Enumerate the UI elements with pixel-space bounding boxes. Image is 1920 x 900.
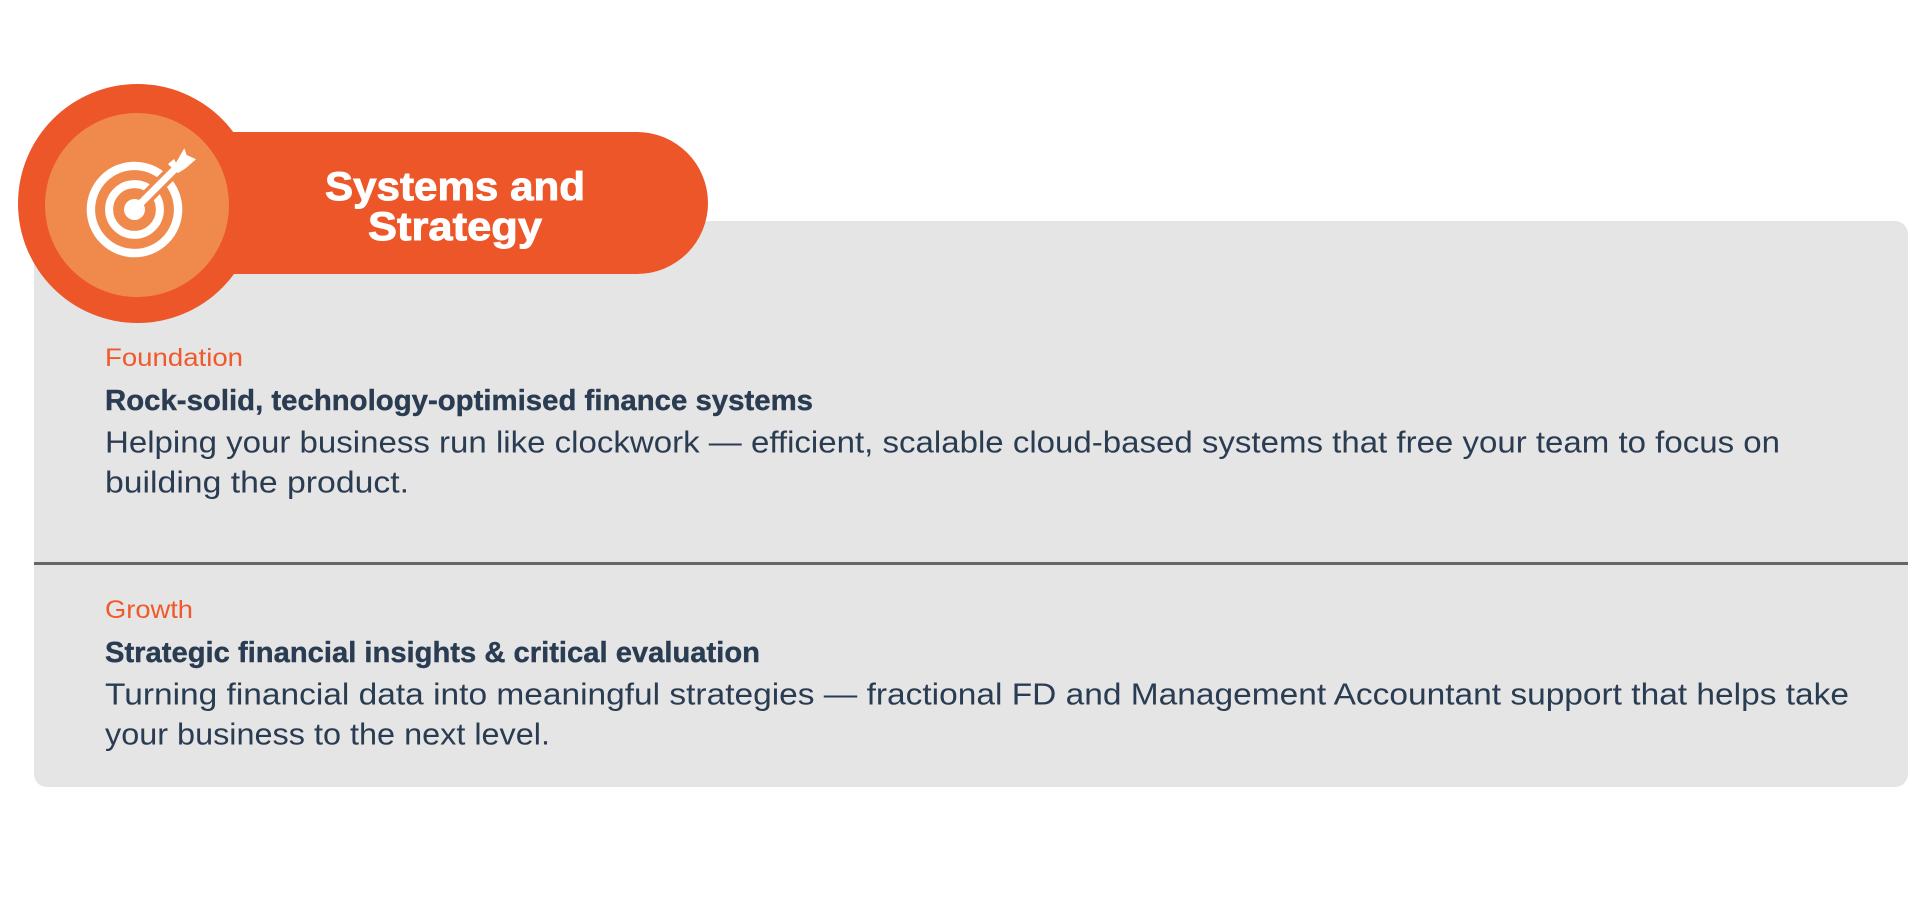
header badge: [18, 84, 708, 323]
text block: growth: [105, 596, 1849, 752]
growth description: Turning financial data into meaningful strategies — fractional FD and Management Accountant support that helps take: [105, 676, 1849, 712]
foundation description: [105, 424, 1780, 500]
foundation description: Helping your business run like clockwork — efficient, scalable cloud-based systems that free your team to focus on: [105, 424, 1780, 460]
foundation heading: Rock-solid, technology-optimised finance systems: [105, 385, 813, 417]
title: Systems and: [325, 165, 585, 209]
foundation label: Foundation: [105, 344, 243, 372]
growth heading: Strategic financial insights & critical evaluation: [105, 637, 760, 669]
growth description: your business to the next level.: [105, 716, 550, 752]
text block: foundation: [105, 344, 1780, 500]
panel: content card: [34, 221, 1908, 787]
growth description: [105, 676, 1849, 752]
header badge: Strategy: [368, 205, 543, 249]
growth label: Growth: [105, 596, 193, 624]
foundation description: building the product.: [105, 464, 409, 500]
icon: target with arrow: [91, 148, 196, 253]
